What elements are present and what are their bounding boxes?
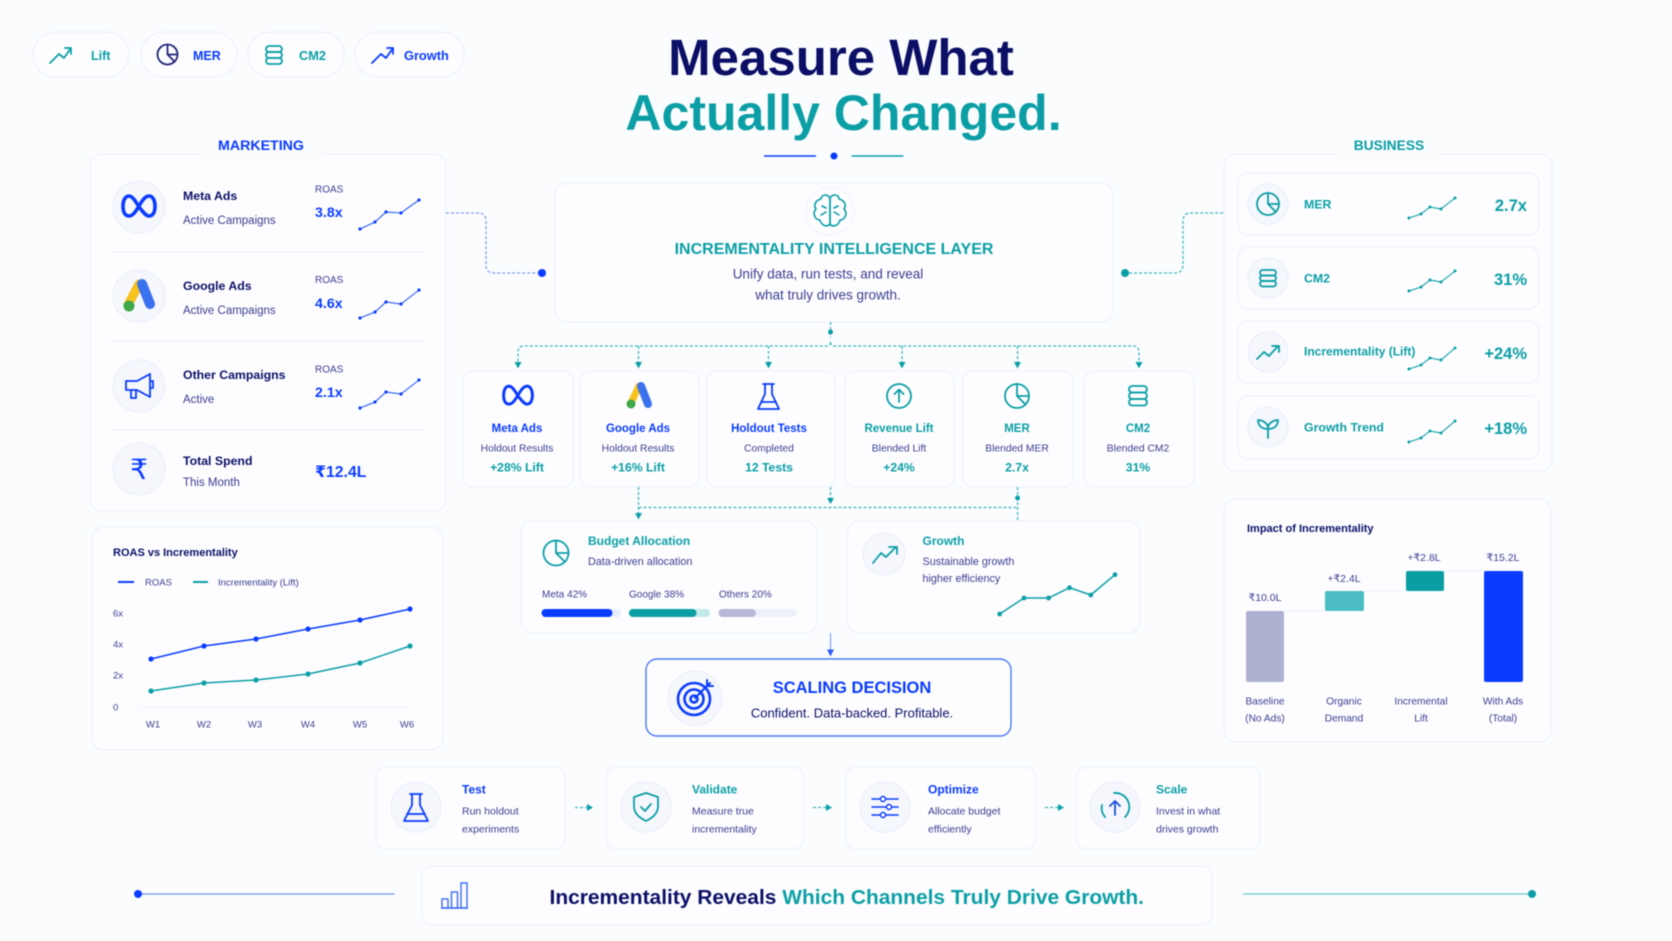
panel: ROAS vs Incrementality chart — [92, 527, 443, 750]
pills row — [33, 32, 464, 77]
arrow head — [1058, 804, 1064, 811]
panel: budget allocation: Data-driven allocation — [588, 556, 692, 568]
row: Growth Trend: Growth Trend — [1304, 420, 1384, 434]
card: Meta Ads: Holdout Results — [481, 444, 553, 454]
title: Measure What — [668, 29, 1014, 86]
card: Google Ads: +16% Lift — [611, 460, 665, 474]
arrow — [575, 806, 588, 808]
bar: baseline: (No Ads) — [1245, 714, 1285, 724]
step: Test — [376, 767, 565, 849]
pill: CM2: CM2 — [299, 48, 326, 63]
row: Other Campaigns: 2.1x — [315, 385, 343, 401]
pill: Lift — [33, 32, 129, 77]
row: Meta Ads: 3.8x — [315, 205, 343, 221]
step: Validate: Measure true — [692, 806, 754, 818]
chart title: ROAS vs Incrementality — [113, 547, 239, 559]
step: Optimize: Allocate budget — [928, 806, 1000, 818]
allocation bars — [542, 590, 797, 617]
step: Validate — [606, 767, 804, 849]
bar: with ads: ₹15.2L — [1487, 552, 1520, 564]
arrow: to scaling decision — [827, 633, 834, 656]
bottom line right — [1243, 890, 1536, 898]
chart title: Impact of Incrementality — [1247, 523, 1374, 535]
process steps — [376, 767, 1260, 849]
card: Meta Ads: +28% Lift — [490, 460, 544, 474]
row: CM2: 31% — [1494, 271, 1527, 289]
description: what truly drives growth. — [754, 288, 901, 302]
x axis labels: W5 — [353, 720, 367, 730]
connector tree: metrics to budget and growth — [635, 487, 1020, 521]
row: Total Spend: ₹ — [130, 454, 148, 485]
row: Other Campaigns: ROAS — [315, 364, 344, 376]
card: Google Ads: Holdout Results — [602, 444, 674, 454]
line: ROAS — [148, 606, 413, 662]
step: Scale: Invest in what — [1156, 806, 1220, 818]
bottom line left — [134, 890, 394, 898]
x axis labels — [146, 720, 414, 730]
row: MER — [1238, 173, 1539, 235]
row: Google Ads: Active Campaigns — [183, 305, 276, 317]
heading: intelligence layer: INCREMENTALITY INTELLIGENCE LAYER — [675, 241, 994, 258]
heading: business: BUSINESS — [1354, 138, 1424, 153]
bar: organic demand: Demand — [1325, 714, 1364, 724]
bar: organic demand: Organic — [1326, 696, 1362, 708]
step: Validate: incrementality — [692, 824, 758, 836]
step: Scale — [1076, 767, 1260, 849]
row: Google Ads: ROAS — [315, 275, 344, 286]
panel: budget allocation: Budget Allocation — [588, 534, 690, 548]
connector: marketing to intelligence layer — [446, 213, 546, 277]
step: Optimize: efficiently — [928, 824, 972, 836]
row: Other Campaigns — [113, 360, 421, 412]
title divider — [764, 152, 904, 160]
pill: CM2 — [248, 32, 344, 77]
card: Holdout Tests: 12 Tests — [745, 460, 793, 474]
sparkline: growth — [997, 572, 1117, 616]
allocation bars: Others 20% — [719, 590, 772, 600]
row: Incrementality: Incrementality (Lift) — [1304, 344, 1415, 358]
icon: bar chart — [441, 883, 468, 908]
bar: with ads: With Ads — [1483, 696, 1523, 708]
panel: growth: Sustainable growth — [922, 556, 1014, 568]
allocation bars: Google 38% — [629, 590, 684, 600]
card: CM2 — [1084, 371, 1194, 487]
icon: brain — [806, 187, 854, 235]
metric cards row — [463, 371, 1194, 487]
panel: growth: Growth — [922, 534, 964, 548]
bar: organic demand: +₹2.4L — [1327, 573, 1361, 585]
connector tree: intelligence layer to metrics — [514, 322, 1142, 368]
x axis labels: W2 — [197, 720, 211, 730]
y axis labels: 4x — [113, 640, 123, 650]
y axis labels: 6x — [113, 608, 123, 620]
card: Meta Ads: Meta Ads — [492, 423, 542, 435]
chart legend — [118, 578, 299, 588]
card: MER: Blended MER — [985, 444, 1049, 454]
bar: with ads — [1483, 552, 1523, 724]
y axis labels: 2x — [113, 670, 123, 682]
description — [733, 266, 923, 302]
row: Other Campaigns: Other Campaigns — [183, 368, 286, 382]
panel: growth: higher efficiency — [922, 573, 1001, 585]
pill: MER — [141, 32, 237, 77]
step: Optimize — [846, 767, 1036, 849]
y axis labels — [113, 608, 123, 714]
card: Meta Ads — [463, 371, 573, 487]
card: Google Ads: Google Ads — [606, 423, 670, 435]
icon: pie — [544, 540, 568, 566]
x axis labels: W3 — [248, 720, 262, 730]
x axis labels: W6 — [400, 720, 414, 730]
row: Growth Trend: +18% — [1484, 420, 1527, 438]
card: MER — [963, 371, 1073, 487]
row: MER: MER — [1304, 198, 1331, 212]
card: Revenue Lift — [845, 371, 954, 487]
heading: marketing: MARKETING — [218, 138, 304, 154]
row: Growth Trend — [1238, 396, 1539, 459]
row: Total Spend — [113, 443, 367, 495]
card: Revenue Lift: +24% — [883, 460, 915, 474]
card: Holdout Tests: Completed — [744, 444, 794, 454]
row: Incrementality — [1238, 321, 1539, 383]
arrow head — [587, 804, 593, 811]
arrow — [1045, 806, 1059, 808]
row: Meta Ads: ROAS — [315, 184, 344, 196]
panel: business — [1224, 138, 1552, 471]
panel: scaling decision — [646, 659, 1011, 736]
step: Scale: drives growth — [1156, 824, 1219, 836]
title: Actually Changed. — [625, 85, 1062, 141]
row: CM2 — [1238, 247, 1539, 309]
row: MER: 2.7x — [1495, 197, 1528, 215]
arrow head — [826, 804, 832, 811]
description: Unify data, run tests, and reveal — [733, 266, 923, 282]
row: Google Ads: 4.6x — [315, 296, 343, 312]
card: Revenue Lift: Revenue Lift — [864, 423, 934, 435]
panel: growth — [848, 521, 1140, 633]
pill: Growth — [355, 32, 464, 77]
step: Optimize: Optimize — [928, 782, 979, 796]
chart legend: Incrementality (Lift) — [218, 578, 299, 588]
arrow — [813, 806, 827, 808]
step: Scale: Scale — [1156, 782, 1188, 796]
bar: incremental lift: Lift — [1414, 714, 1428, 724]
bottom banner — [422, 866, 1212, 925]
step: Validate: Validate — [692, 782, 738, 796]
bar: baseline: Baseline — [1245, 696, 1285, 708]
allocation bars: Meta 42% — [542, 590, 587, 600]
bar: incremental lift: Incremental — [1394, 696, 1448, 708]
card: Revenue Lift: Blended Lift — [872, 444, 926, 454]
card: CM2: CM2 — [1126, 423, 1150, 435]
row: Total Spend: This Month — [183, 477, 240, 489]
row: Google Ads: Google Ads — [183, 279, 252, 293]
row: Other Campaigns: Active — [183, 394, 214, 406]
row: Total Spend: ₹12.4L — [315, 464, 367, 481]
bar: incremental lift — [1394, 552, 1448, 724]
title — [625, 29, 1062, 141]
row: Total Spend: Total Spend — [183, 454, 252, 468]
step: Test: Test — [462, 782, 486, 796]
icon: target — [668, 671, 722, 725]
panel: budget allocation — [521, 521, 817, 633]
step: Test: experiments — [462, 824, 519, 836]
card: Holdout Tests: Holdout Tests — [731, 423, 807, 435]
bar: baseline — [1245, 592, 1285, 724]
card: Holdout Tests — [707, 371, 835, 487]
bar: organic demand — [1325, 573, 1364, 724]
pill: Lift: Lift — [91, 49, 111, 63]
card: MER: 2.7x — [1005, 460, 1029, 474]
line: Incrementality — [148, 643, 413, 694]
banner text: Incrementality Reveals Which Channels Truly Drive Growth. — [550, 887, 1144, 909]
y axis labels: 0 — [113, 702, 118, 714]
connector: intelligence layer to business — [1121, 213, 1223, 277]
card: CM2: 31% — [1126, 460, 1150, 474]
pill: MER: MER — [193, 49, 221, 63]
panel: scaling decision: SCALING DECISION — [773, 679, 931, 697]
chart legend: ROAS — [145, 578, 172, 588]
x axis labels: W1 — [146, 720, 160, 730]
row: Meta Ads — [113, 181, 421, 233]
row: CM2: CM2 — [1304, 272, 1330, 286]
panel: scaling decision: Confident. Data-backed. Profitable. — [751, 706, 953, 720]
panel: marketing — [90, 138, 446, 511]
row: Meta Ads: Active Campaigns — [183, 215, 276, 227]
card: CM2: Blended CM2 — [1107, 444, 1169, 454]
panel: intelligence layer — [555, 183, 1113, 322]
row: Google Ads — [113, 270, 421, 322]
step: Test: Run holdout — [462, 806, 519, 818]
panel: impact of incrementality waterfall — [1224, 499, 1551, 742]
bar: incremental lift: +₹2.8L — [1407, 552, 1441, 564]
bar: baseline: ₹10.0L — [1249, 592, 1282, 604]
row: Incrementality: +24% — [1484, 345, 1527, 363]
bar: with ads: (Total) — [1489, 714, 1517, 724]
x axis labels: W4 — [301, 720, 315, 730]
row: Meta Ads: Meta Ads — [183, 189, 237, 203]
pill: Growth: Growth — [404, 48, 449, 63]
card: MER: MER — [1004, 423, 1030, 435]
card: Google Ads — [580, 371, 699, 487]
